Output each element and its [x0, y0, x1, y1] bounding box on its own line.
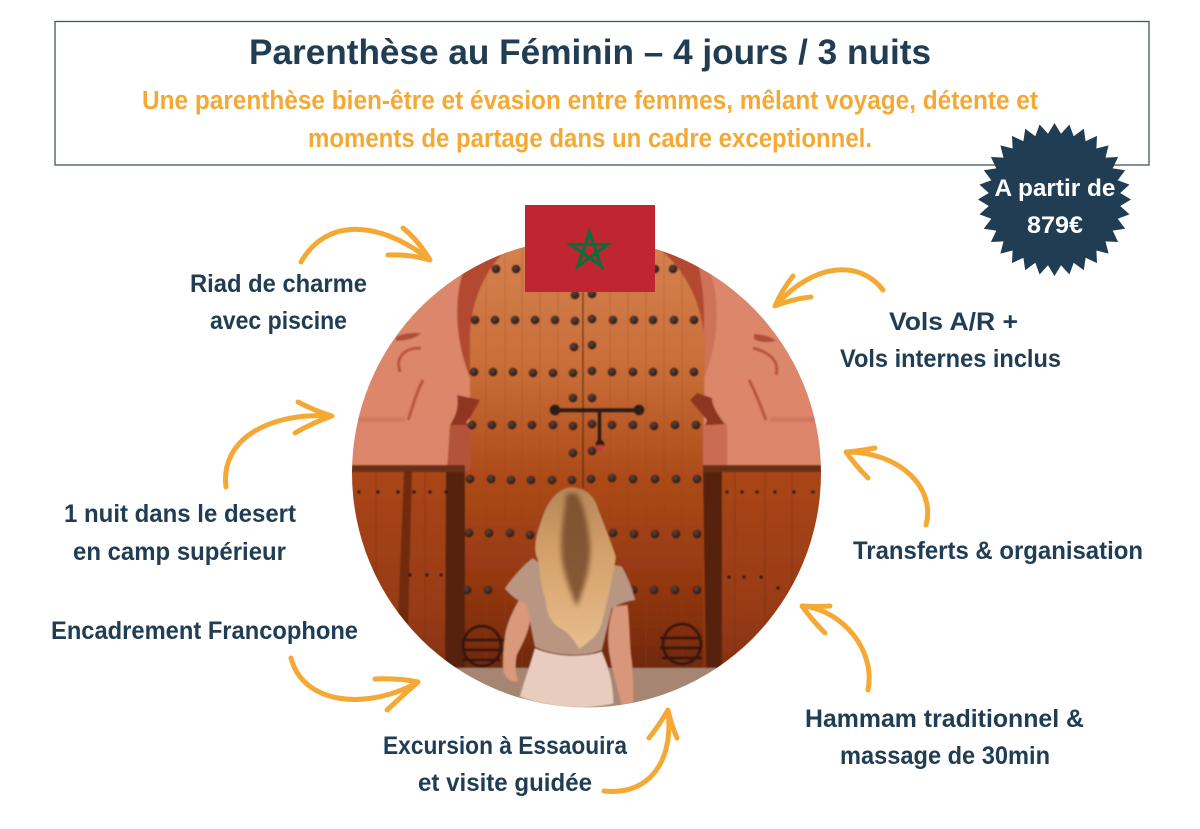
circular photo: door and woman	[345, 230, 830, 716]
arrow: vols	[775, 270, 883, 306]
door studs	[462, 264, 702, 594]
subtitle: moments de partage dans un cadre exceptionnel.	[308, 125, 872, 153]
label: vols	[840, 308, 1061, 373]
door ironwork	[462, 624, 702, 666]
subtitle: Une parenthèse bien-être et évasion entre femmes, mêlant voyage, détente et	[142, 87, 1038, 115]
label: hammam: massage de 30min	[840, 742, 1050, 770]
arrow: desert	[225, 402, 332, 487]
label: desert	[64, 500, 297, 566]
arch recess	[456, 251, 705, 377]
plank lines	[486, 245, 682, 670]
small panel studs	[357, 490, 815, 590]
header box	[55, 22, 1149, 165]
subtitle	[142, 87, 1038, 153]
label: hammam	[805, 705, 1084, 770]
arrow: encadrement	[291, 658, 418, 710]
price badge: A partir de	[994, 175, 1116, 202]
price badge	[978, 123, 1131, 276]
label: hammam: Hammam traditionnel &	[805, 705, 1084, 733]
label: desert: en camp supérieur	[73, 538, 286, 566]
label: vols: Vols A/R +	[889, 308, 1018, 336]
price badge: 879€	[1027, 212, 1083, 239]
label: encadrement: Encadrement Francophone	[51, 617, 358, 645]
carved wall details	[396, 333, 776, 342]
label: vols: Vols internes inclus	[840, 345, 1061, 373]
wood panels	[352, 471, 448, 661]
door wood	[462, 245, 705, 672]
label: riad: avec piscine	[210, 307, 347, 335]
floor	[454, 666, 718, 708]
arrow: transferts	[846, 448, 928, 525]
label: excursion	[383, 732, 628, 797]
label: excursion: Excursion à Essaouira	[383, 732, 628, 760]
door latch	[550, 404, 644, 452]
arrow: hammam	[802, 606, 869, 690]
label: riad	[190, 270, 367, 335]
label: excursion: et visite guidée	[418, 769, 592, 797]
label: desert: 1 nuit dans le desert	[64, 500, 297, 528]
woman	[503, 487, 635, 707]
label: riad: Riad de charme	[190, 270, 367, 298]
flag of Morocco	[525, 205, 655, 292]
title: Parenthèse au Féminin – 4 jours / 3 nuits	[249, 33, 931, 72]
arch base	[450, 395, 480, 428]
flag star	[571, 232, 608, 266]
arrow: riad	[301, 228, 430, 262]
label: transferts: Transferts & organisation	[853, 537, 1143, 565]
arrow: excursion	[604, 710, 677, 791]
